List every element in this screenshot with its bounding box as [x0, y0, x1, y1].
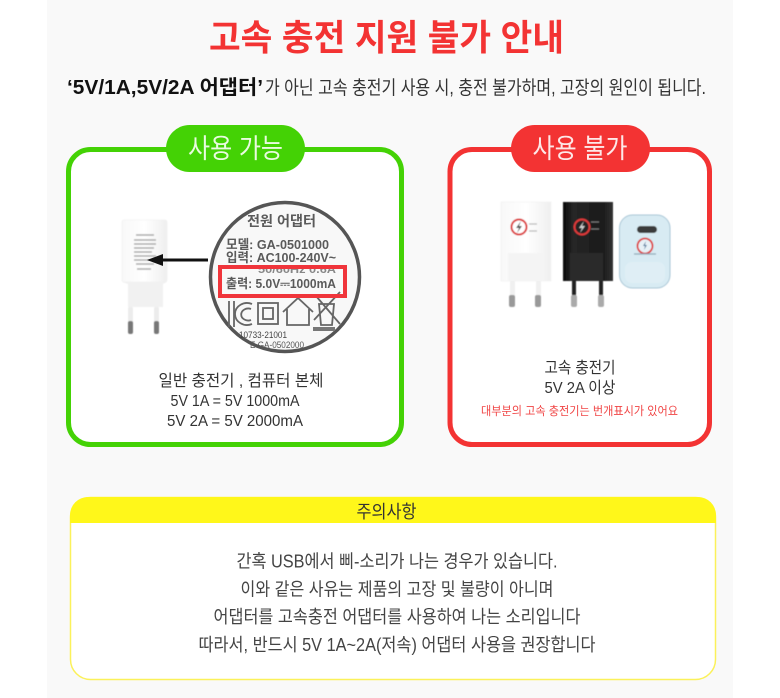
badge: usable [166, 125, 305, 172]
icon: white fast charger [501, 202, 551, 307]
icon: white charger [122, 220, 167, 334]
badge: usable: 사용 가능 [188, 134, 283, 164]
notice box [70, 497, 716, 680]
icon: blue fast charger [620, 215, 670, 288]
subtitle: ‘5V/1A,5V/2A 어댑터’ [67, 76, 263, 99]
label text: 전원 어댑터 [247, 213, 316, 229]
notice text [198, 552, 596, 655]
text: red note: 대부분의 고속 충전기는 번개표시가 있어요 [481, 404, 678, 418]
notice text: 간혹 USB에서 삐-소리가 나는 경우가 있습니다. [236, 552, 558, 572]
certification marks [229, 292, 340, 327]
text: fast charger [544, 359, 616, 397]
text: usable charger specs: 일반 충전기 , 컴퓨터 본체 [158, 372, 324, 390]
panel: not usable [450, 125, 710, 444]
badge: not usable [511, 125, 650, 172]
title: 고속 충전 지원 불가 안내 [209, 17, 564, 58]
text: fast charger: 고속 충전기 [544, 359, 616, 377]
label text [226, 213, 337, 350]
highlight: output rating [220, 267, 345, 296]
notice frame [70, 498, 716, 680]
arrow [147, 254, 208, 266]
notice text: 이와 같은 사유는 제품의 고장 및 불량이 아니며 [240, 580, 554, 600]
label text: E GA-0502000 [250, 340, 304, 350]
text: usable charger specs: 5V 2A = 5V 2000mA [167, 413, 303, 430]
notice text: 어댑터를 고속충전 어댑터를 사용하여 나는 소리입니다 [214, 607, 581, 627]
subtitle: 가 아닌 고속 충전기 사용 시, 충전 불가하며, 고장의 원인이 됩니다. [265, 77, 706, 99]
label text: 입력: AC100-240V~ [226, 250, 336, 265]
text: fast charger: 5V 2A 이상 [544, 379, 616, 397]
icon: black fast charger [563, 202, 613, 307]
subtitle [67, 76, 706, 99]
label text: 모델: GA-0501000 [226, 237, 329, 252]
badge: not usable: 사용 불가 [532, 134, 628, 164]
panel frame: usable [68, 150, 402, 444]
notice header: 주의사항 [356, 502, 416, 522]
text: usable charger specs [158, 372, 324, 430]
label text: 10733-21001 [239, 330, 287, 340]
label text: 출력: 5.0V⎓1000mA [226, 276, 337, 291]
notice text: 따라서, 반드시 5V 1A~2A(저속) 어댑터 사용을 권장합니다 [198, 635, 596, 655]
panel frame: not usable [450, 150, 710, 444]
panel: usable [68, 125, 402, 444]
text: usable charger specs: 5V 1A = 5V 1000mA [170, 393, 300, 410]
label text: 50/60Hz 0.6A [258, 264, 336, 276]
magnified label circle [210, 202, 360, 352]
notice header [70, 497, 716, 523]
